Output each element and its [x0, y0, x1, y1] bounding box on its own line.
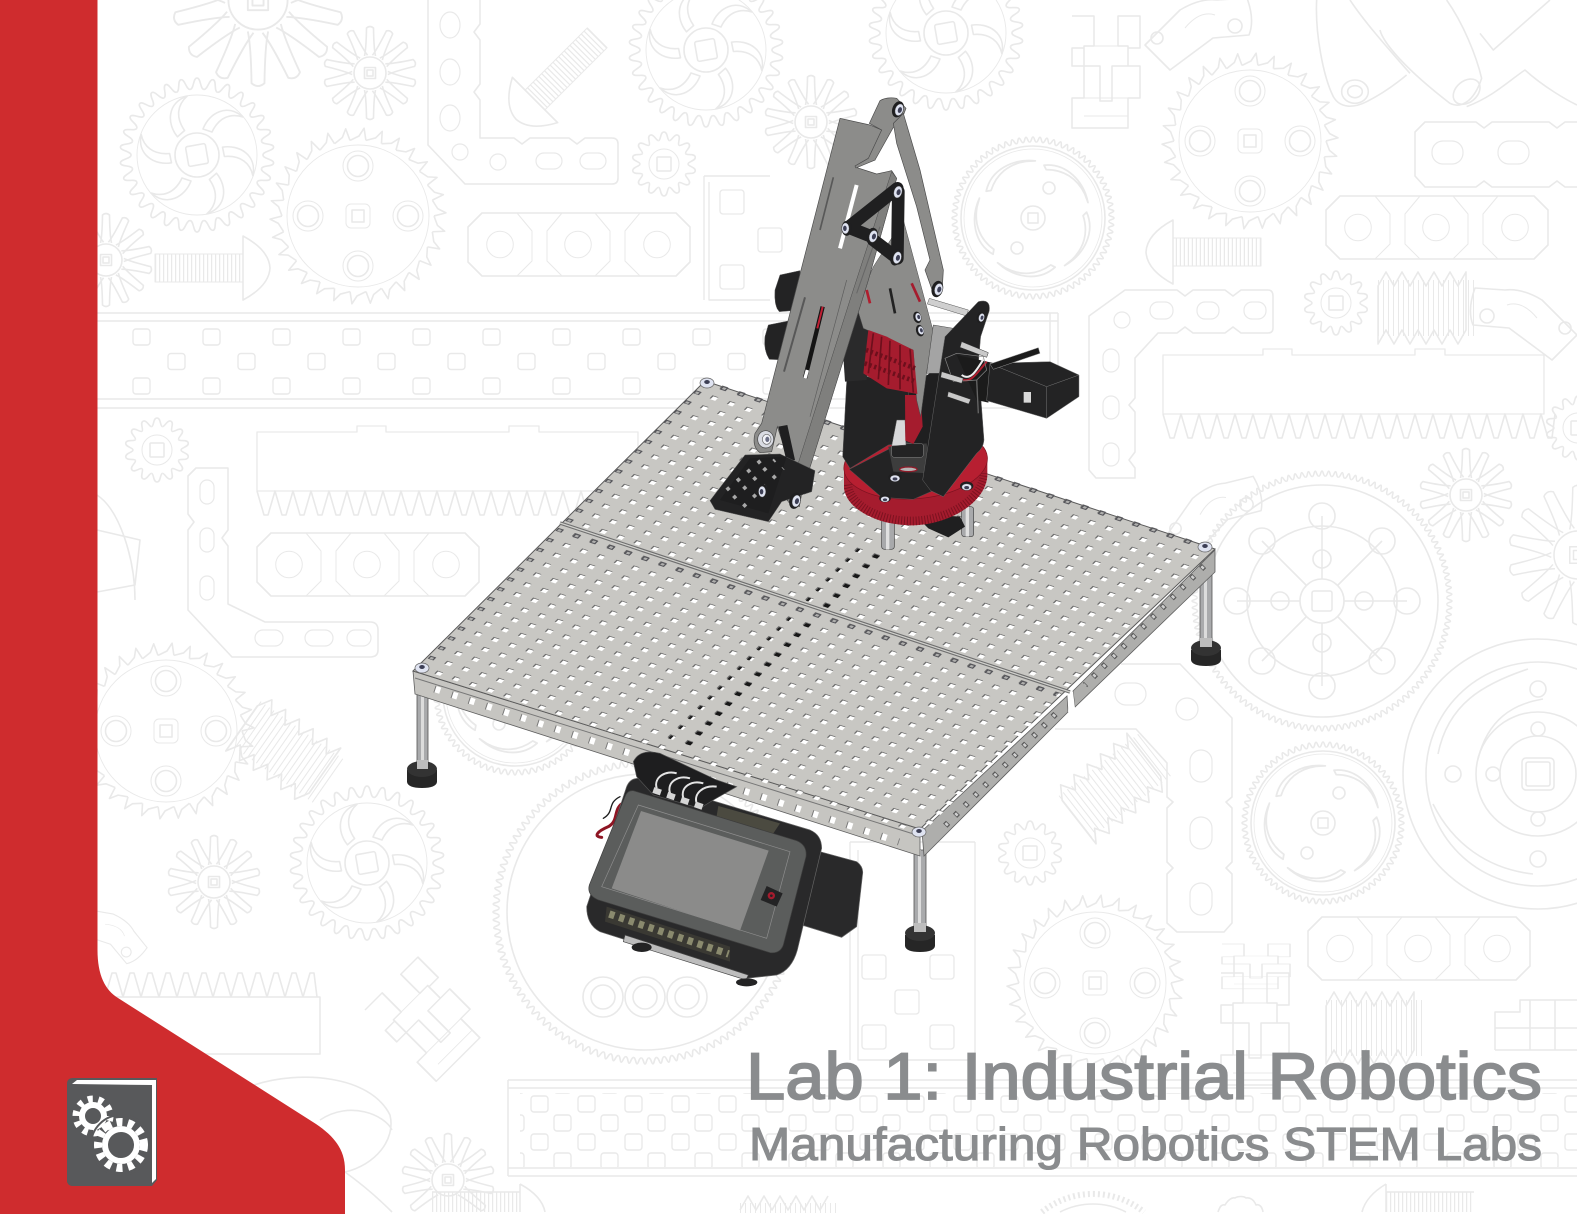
red and white wires — [596, 797, 625, 840]
robot arm on rotating base — [710, 98, 1079, 549]
top link — [855, 98, 906, 168]
cable bundle — [633, 752, 737, 808]
brain body — [587, 778, 822, 978]
right tower plate — [923, 301, 989, 497]
dark inner tower fill — [900, 367, 940, 480]
hole grid — [420, 381, 1207, 834]
subtitle: Manufacturing Robotics STEM Labs — [749, 1118, 1542, 1170]
big gear with ring holes — [477, 744, 813, 1080]
racks — [1163, 349, 1555, 438]
dark outer column and seam rows — [420, 391, 699, 670]
front leg — [905, 850, 935, 952]
bezel inset line — [602, 805, 790, 938]
red side band with chamfered bottom — [0, 0, 345, 1214]
bolts — [155, 236, 270, 300]
spoked gear — [1178, 457, 1466, 745]
chains — [1072, 16, 1140, 128]
main front arm plate — [754, 118, 897, 507]
black triangle link — [848, 188, 898, 258]
left motors — [765, 271, 800, 360]
freeform parts — [1145, 0, 1252, 70]
hex plates — [468, 213, 690, 276]
L plates — [428, 0, 618, 184]
screen bezel — [589, 791, 806, 953]
camera box behind brain — [802, 852, 863, 937]
table top surface — [413, 381, 1215, 829]
silver rods — [927, 298, 968, 373]
dark column holes — [687, 555, 877, 745]
worms — [1378, 272, 1474, 344]
lower port row — [605, 907, 730, 962]
long right link — [893, 113, 943, 293]
red linkage — [905, 395, 923, 444]
plate slots and details — [784, 177, 920, 417]
top port row — [717, 806, 780, 833]
strip plate — [787, 172, 897, 507]
icon: gear book — [67, 1078, 157, 1186]
red turntable gear — [844, 444, 988, 526]
right leg — [1191, 560, 1221, 666]
servo motor — [945, 348, 1079, 418]
corner screws — [415, 378, 1212, 837]
base standoffs — [882, 507, 974, 549]
foot bracket — [710, 425, 815, 522]
left leg — [407, 680, 437, 788]
mounting rail — [623, 935, 748, 980]
control brain with cables — [587, 752, 863, 986]
base plate — [849, 443, 938, 499]
lower joint — [888, 420, 930, 473]
brain feet — [632, 943, 757, 986]
left tower plate — [843, 374, 912, 468]
power button — [761, 886, 783, 907]
dark mechanism behind arm — [840, 300, 873, 382]
arm pins — [758, 100, 986, 510]
touch screen — [612, 811, 769, 931]
table legs and feet — [407, 560, 1221, 952]
front-left skirt — [413, 671, 920, 856]
grid table — [413, 378, 1215, 856]
rear gray arm — [857, 220, 937, 417]
hub gear — [1403, 639, 1577, 909]
panel seam — [560, 523, 1070, 692]
front-right skirt — [922, 550, 1215, 856]
title: Lab 1: Industrial Robotics — [746, 1039, 1542, 1113]
beams — [97, 313, 1058, 408]
stacked red gears — [863, 330, 917, 394]
plate standoffs — [941, 342, 988, 404]
